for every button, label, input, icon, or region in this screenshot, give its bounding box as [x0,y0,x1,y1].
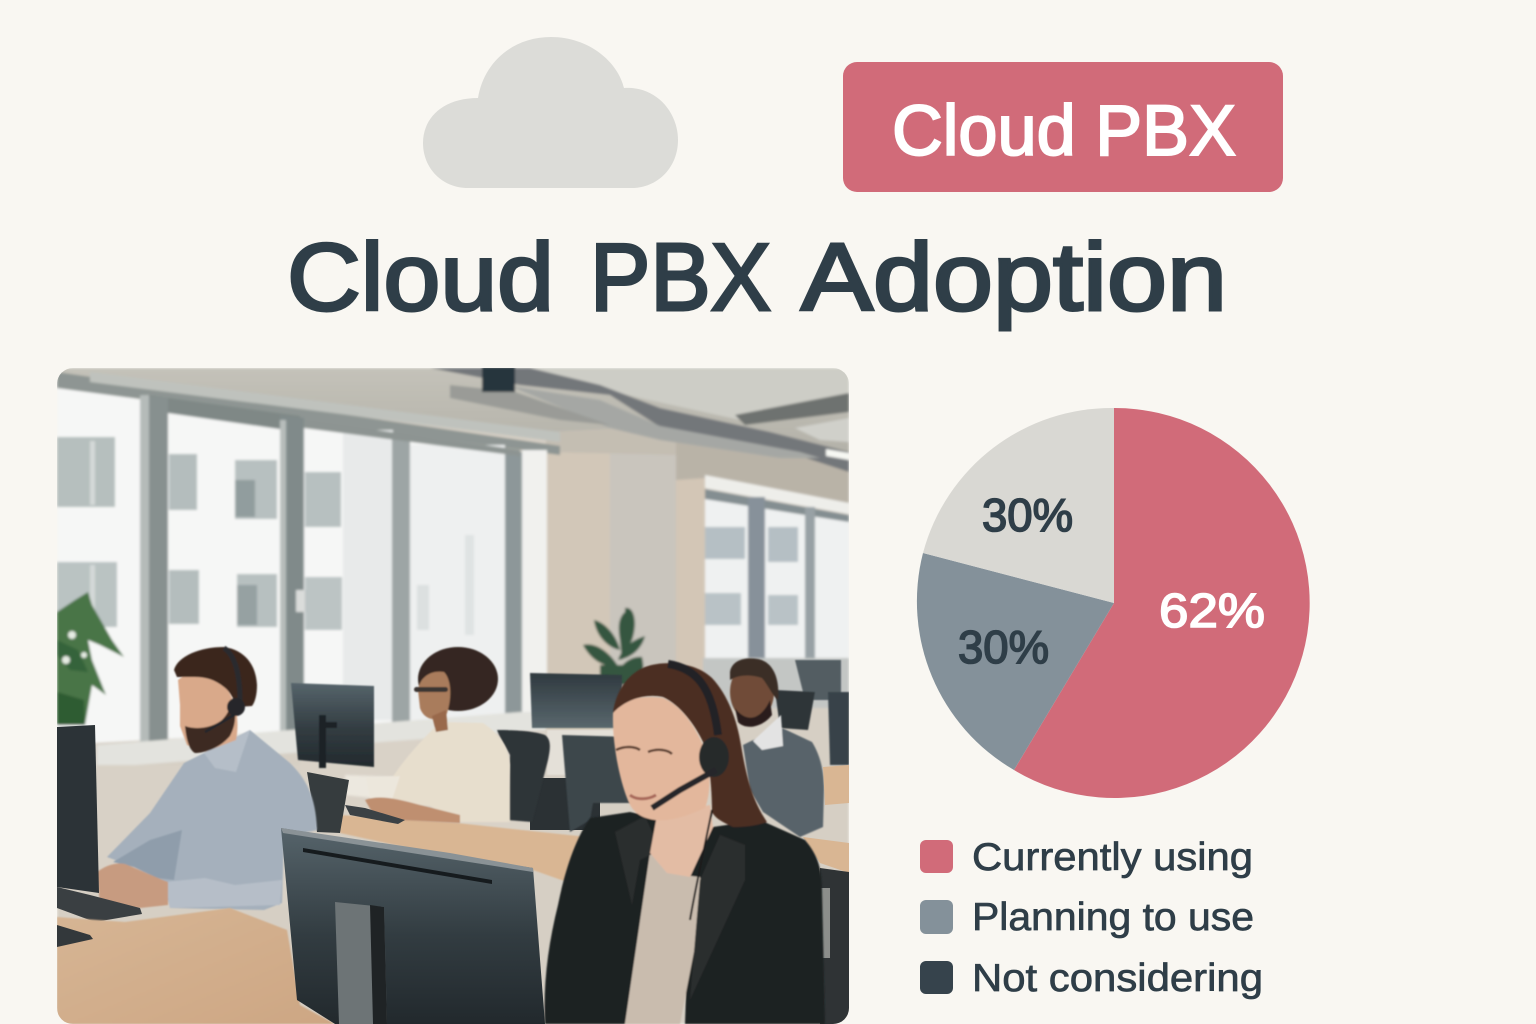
rear centre monitor [562,735,633,832]
slice: currently using 62% [1014,408,1310,798]
legend item: planning to use: Planning to use [972,896,1254,939]
keyboard [57,887,142,922]
pie chart [917,408,1310,798]
badge: Cloud PBX [843,62,1283,192]
laptop [345,805,405,824]
main monitor [281,828,545,1024]
right chair [820,868,849,1024]
label 62%: 62% [1159,585,1265,638]
title: Adoption [801,224,1227,331]
window header strips [57,372,560,455]
slice: planning to use 30% [917,553,1114,770]
photo: call centre office [57,367,849,1024]
man with blue shirt [97,647,317,910]
man 3 in sweater [730,658,824,837]
right window [705,475,849,514]
window sill and wainscot [97,712,546,768]
tablet on desk [57,925,93,947]
ceiling and walls [57,368,849,1024]
chair rear [497,730,550,822]
chair behind man [307,772,349,833]
title: Cloud [287,224,554,331]
mullions [147,398,170,742]
left plant [57,592,124,725]
main woman with headset [545,663,825,1024]
monitor behind man [291,683,374,768]
icon: cloud [423,37,678,188]
front desk [57,908,335,1024]
title [287,224,1227,331]
label 30% upper: 30% [982,489,1073,541]
legend item: currently using: Currently using [972,836,1253,879]
ducts [430,368,849,472]
building panels [343,430,393,720]
mid plant [583,608,645,685]
dark area under rear desks [530,778,600,830]
slice: not considering 30% [923,408,1114,603]
label 30% lower: 30% [958,621,1049,673]
desk behind [340,815,587,882]
woman 2 with afro hair [365,647,510,823]
title: PBX [590,224,771,331]
legend [920,836,1263,1000]
rear monitors [530,660,849,775]
legend item: not considering: Not considering [972,957,1263,1000]
left monitor [57,725,99,893]
badge: Cloud PBX: Cloud PBX [892,92,1236,171]
left window [57,387,431,744]
